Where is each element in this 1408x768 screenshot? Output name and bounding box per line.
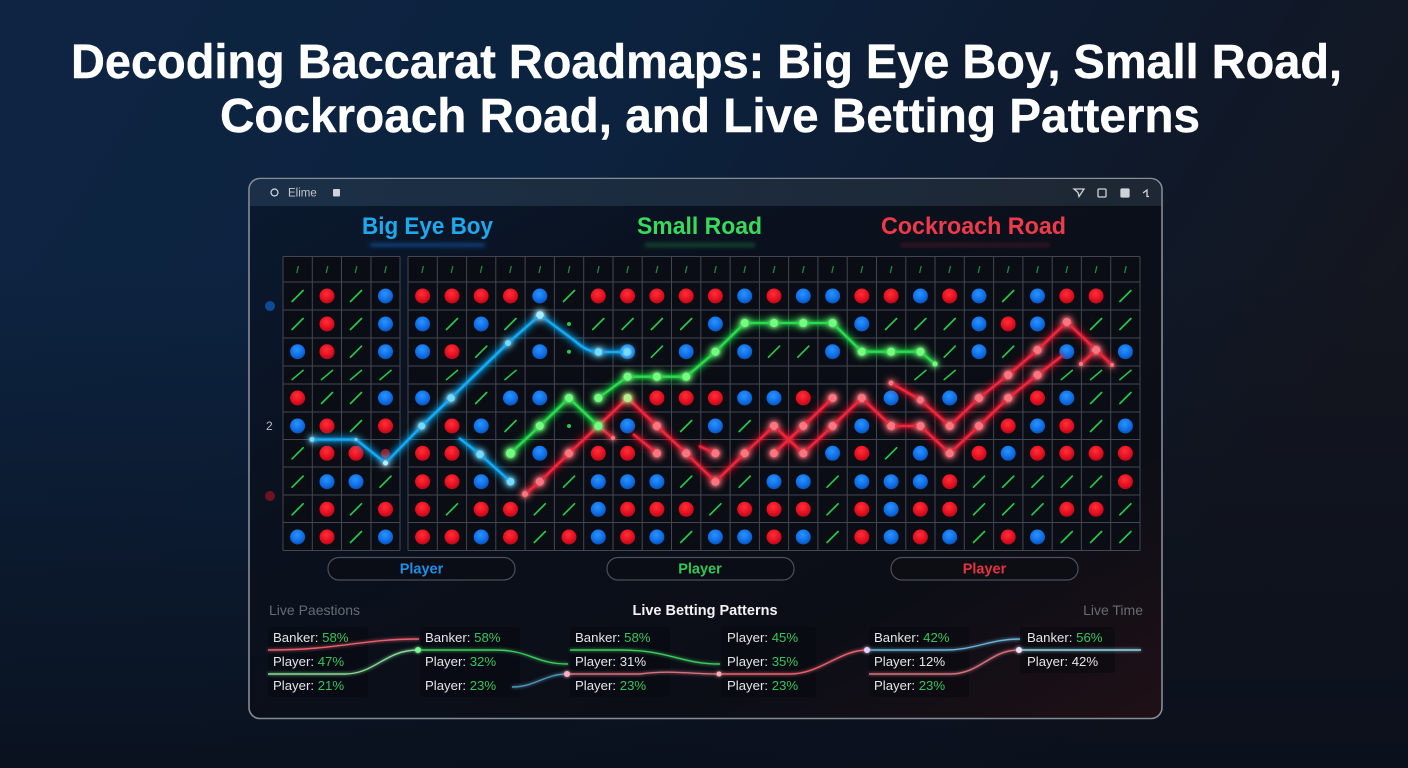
legend pill: blue Player: Player	[400, 562, 444, 578]
title	[71, 36, 1342, 143]
icon: toolbar right	[1074, 189, 1149, 197]
side marker: blue	[265, 301, 275, 311]
connector lines	[268, 639, 1141, 687]
line chart: green Small Road	[506, 319, 938, 458]
betting stats: column 2: Banker: 58%	[425, 630, 501, 645]
betting stats: column 2: Player: 32%	[425, 654, 496, 669]
heading: Small Road: Small Road	[637, 213, 762, 240]
betting stats: column 6: Player: 42%	[1027, 654, 1098, 669]
legend pill: blue Player	[328, 558, 515, 580]
betting stats: column 3: Player: 31%	[575, 654, 646, 669]
heading: Live Betting Patterns: Live Betting Patterns	[632, 603, 778, 619]
betting stats: column 1: Banker: 58%	[273, 630, 349, 645]
betting stats: column 4: Player: 45%	[727, 630, 798, 645]
row 2	[292, 316, 1131, 332]
row 7	[292, 446, 1133, 461]
betting stats: column 1	[273, 630, 349, 693]
legend pill: green Player: Player	[678, 562, 722, 578]
betting stats: column 5	[874, 630, 950, 693]
section label: Live Time: Live Time	[1083, 602, 1143, 618]
row 0 small ticks	[297, 266, 1126, 273]
legend pill: red Player	[891, 558, 1078, 580]
betting stats: column 5: Player: 12%	[874, 654, 945, 669]
row 5	[290, 390, 1131, 406]
row 8	[292, 474, 1133, 489]
label plates	[268, 627, 1115, 697]
legend pill: green Player	[607, 558, 794, 580]
icon: window circle	[271, 189, 278, 196]
row 3	[290, 344, 1133, 359]
line chart: blue Big Eye Boy	[310, 311, 631, 486]
legend pill: red Player: Player	[963, 562, 1007, 578]
betting stats: column 5: Player: 23%	[874, 678, 945, 693]
icon: book	[333, 189, 340, 196]
side marker: red	[265, 491, 275, 501]
line chart: red Cockroach Road	[522, 318, 1114, 497]
betting stats: column 2	[425, 630, 501, 693]
betting stats: column 2: Player: 23%	[425, 678, 496, 693]
panel: roadmap dashboard	[249, 178, 1162, 718]
betting stats: column 3: Banker: 58%	[575, 630, 651, 645]
panel top bar	[250, 179, 1161, 206]
betting stats: column 6: Banker: 56%	[1027, 630, 1103, 645]
betting stats: column 1: Player: 47%	[273, 654, 344, 669]
title: Decoding Baccarat Roadmaps: Big Eye Boy, Small Road,	[71, 36, 1342, 89]
title: Cockroach Road, and Live Betting Patterns	[220, 90, 1200, 143]
betting stats: column 6	[1027, 630, 1103, 669]
heading: Big Eye Boy: Big Eye Boy	[362, 213, 494, 240]
roadmap grid	[283, 256, 1140, 550]
row 10	[290, 530, 1131, 544]
row 6	[290, 418, 1133, 434]
betting stats: column 5: Banker: 42%	[874, 630, 950, 645]
bar label: Elime	[288, 188, 317, 200]
betting stats: column 4	[727, 630, 798, 693]
betting stats: column 4: Player: 35%	[727, 654, 798, 669]
betting stats: column 4: Player: 23%	[727, 678, 798, 693]
betting stats: column 3	[575, 630, 651, 693]
row 9	[292, 502, 1131, 517]
section label: Live Paestions: Live Paestions	[269, 602, 360, 618]
betting stats: column 1: Player: 21%	[273, 678, 344, 693]
heading: Cockroach Road: Cockroach Road	[881, 213, 1066, 240]
side marker: number: 2	[266, 419, 273, 433]
row 4	[292, 370, 1131, 380]
betting stats: column 3: Player: 23%	[575, 678, 646, 693]
row 1	[292, 288, 1131, 304]
